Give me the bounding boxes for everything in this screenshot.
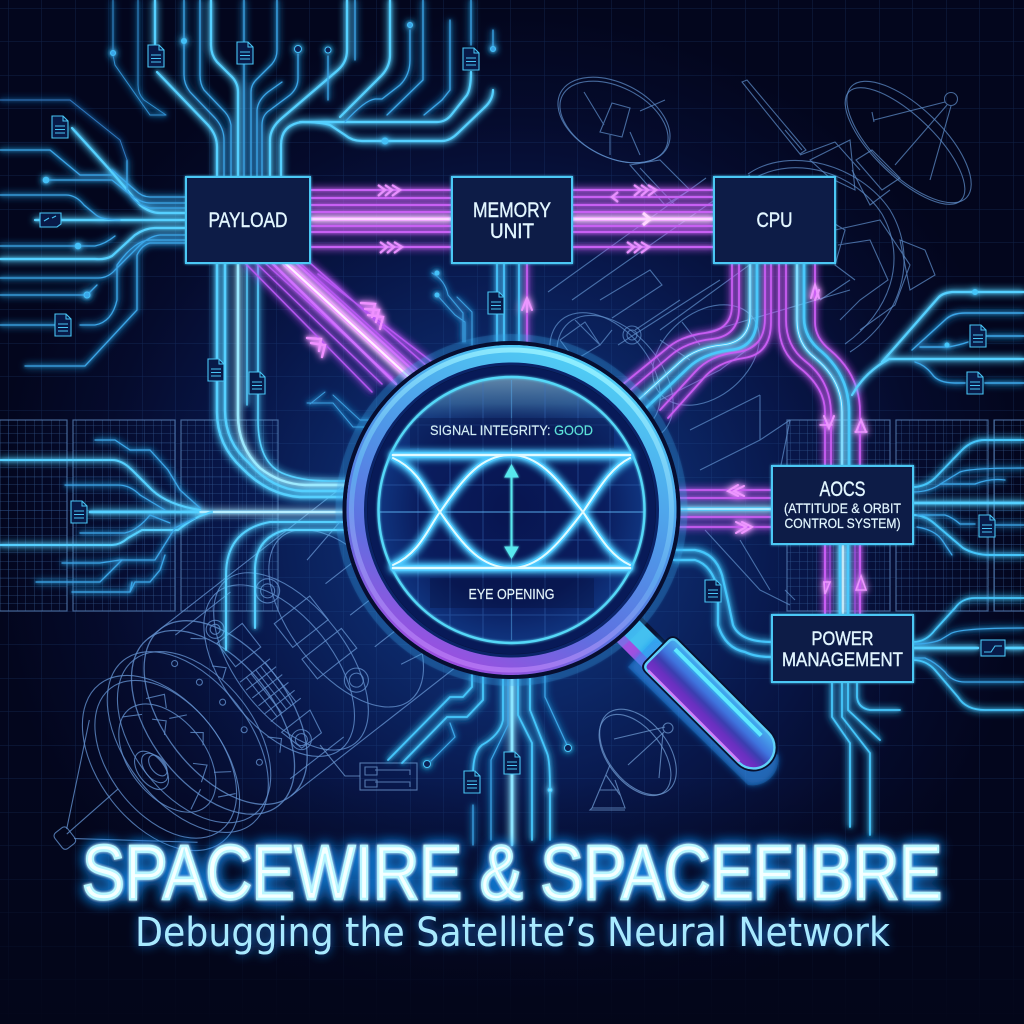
chip icon: power (981, 640, 1005, 656)
main ring (748, 160, 904, 352)
eye opening label: EYE OPENING (468, 586, 554, 603)
document: right of AOCS (979, 515, 995, 537)
blue network: left of lens (0, 440, 352, 650)
blue network: upper right (852, 290, 1024, 395)
blue network: payload top (110, 0, 496, 177)
right dish (828, 62, 990, 222)
node box: payload (186, 177, 310, 263)
magnifier handle (612, 620, 787, 785)
magnifier lens (340, 338, 684, 682)
memory to lens verticals (307, 263, 532, 427)
eye opening arrow (505, 465, 518, 558)
subtitle: Debugging the Satellite’s Neural Network (135, 910, 891, 956)
document: top 3 (463, 48, 479, 70)
lens to power cables (674, 550, 772, 657)
node box: power management: POWER (812, 629, 874, 650)
document: top 2 (237, 42, 253, 64)
chevron arrows on purple links (378, 185, 656, 253)
document: below lens 2 (504, 752, 520, 774)
blueprint: lower satellite cylinder (0, 476, 486, 927)
AOCS to power links (824, 544, 866, 615)
nose cone (11, 714, 198, 910)
node box: memory unit: UNIT (490, 220, 534, 243)
node box: memory unit: MEMORY (473, 199, 551, 222)
document: below memory (488, 292, 504, 314)
antenna (742, 80, 806, 154)
node box: AOCS: AOCS (820, 478, 866, 501)
body cylinder (548, 175, 850, 345)
blue network: right of AOCS (913, 440, 1024, 555)
documents and chips (40, 42, 1005, 793)
signal integrity label: SIGNAL INTEGRITY: GOOD (430, 422, 593, 438)
purple diagonal bus to lens (245, 263, 432, 392)
left dish (544, 60, 690, 205)
document: panel left (71, 501, 87, 523)
chip icon: left (40, 213, 61, 227)
blue network: payload left (0, 100, 186, 366)
eye curves (393, 455, 630, 568)
purple links: payload to memory to CPU (310, 190, 714, 247)
solar panels left (0, 420, 278, 611)
lens face with eye diagram (368, 366, 656, 654)
blue network: below power (832, 682, 900, 835)
solar panels right (787, 420, 1024, 611)
document: by power (705, 580, 721, 602)
blue network: below lens (388, 675, 572, 845)
node box: AOCS: CONTROL SYSTEM) (784, 515, 900, 531)
node box: power management: MANAGEMENT (782, 650, 903, 671)
document: left 2 (55, 314, 71, 336)
blueprint: small dish bottom (584, 695, 692, 810)
node box: CPU (714, 177, 835, 263)
node box: CPU: CPU (756, 209, 792, 232)
node box: power management (772, 615, 913, 682)
document: top 1 (148, 45, 164, 67)
document: below payload 1 (208, 359, 224, 381)
node box: AOCS (772, 466, 913, 544)
CPU bus to lens and AOCS (622, 263, 867, 466)
document: below payload 2 (249, 372, 265, 394)
blue network: right of power (913, 598, 1024, 710)
lens frame (340, 338, 684, 682)
document: below lens 1 (464, 771, 480, 793)
document: upper right 1 (970, 325, 986, 347)
node box: AOCS: (ATTITUDE & ORBIT (784, 500, 901, 516)
document: left 1 (52, 116, 68, 138)
lens to AOCS links (675, 485, 772, 533)
document: upper right 2 (967, 372, 983, 394)
node box: memory unit (452, 177, 572, 263)
blueprint: small table (320, 745, 417, 790)
rings and shell (51, 646, 271, 880)
node box: payload: PAYLOAD (208, 209, 288, 232)
blue network: below payload to lens (217, 263, 352, 497)
blueprint: upper satellite with dishes (528, 60, 990, 605)
